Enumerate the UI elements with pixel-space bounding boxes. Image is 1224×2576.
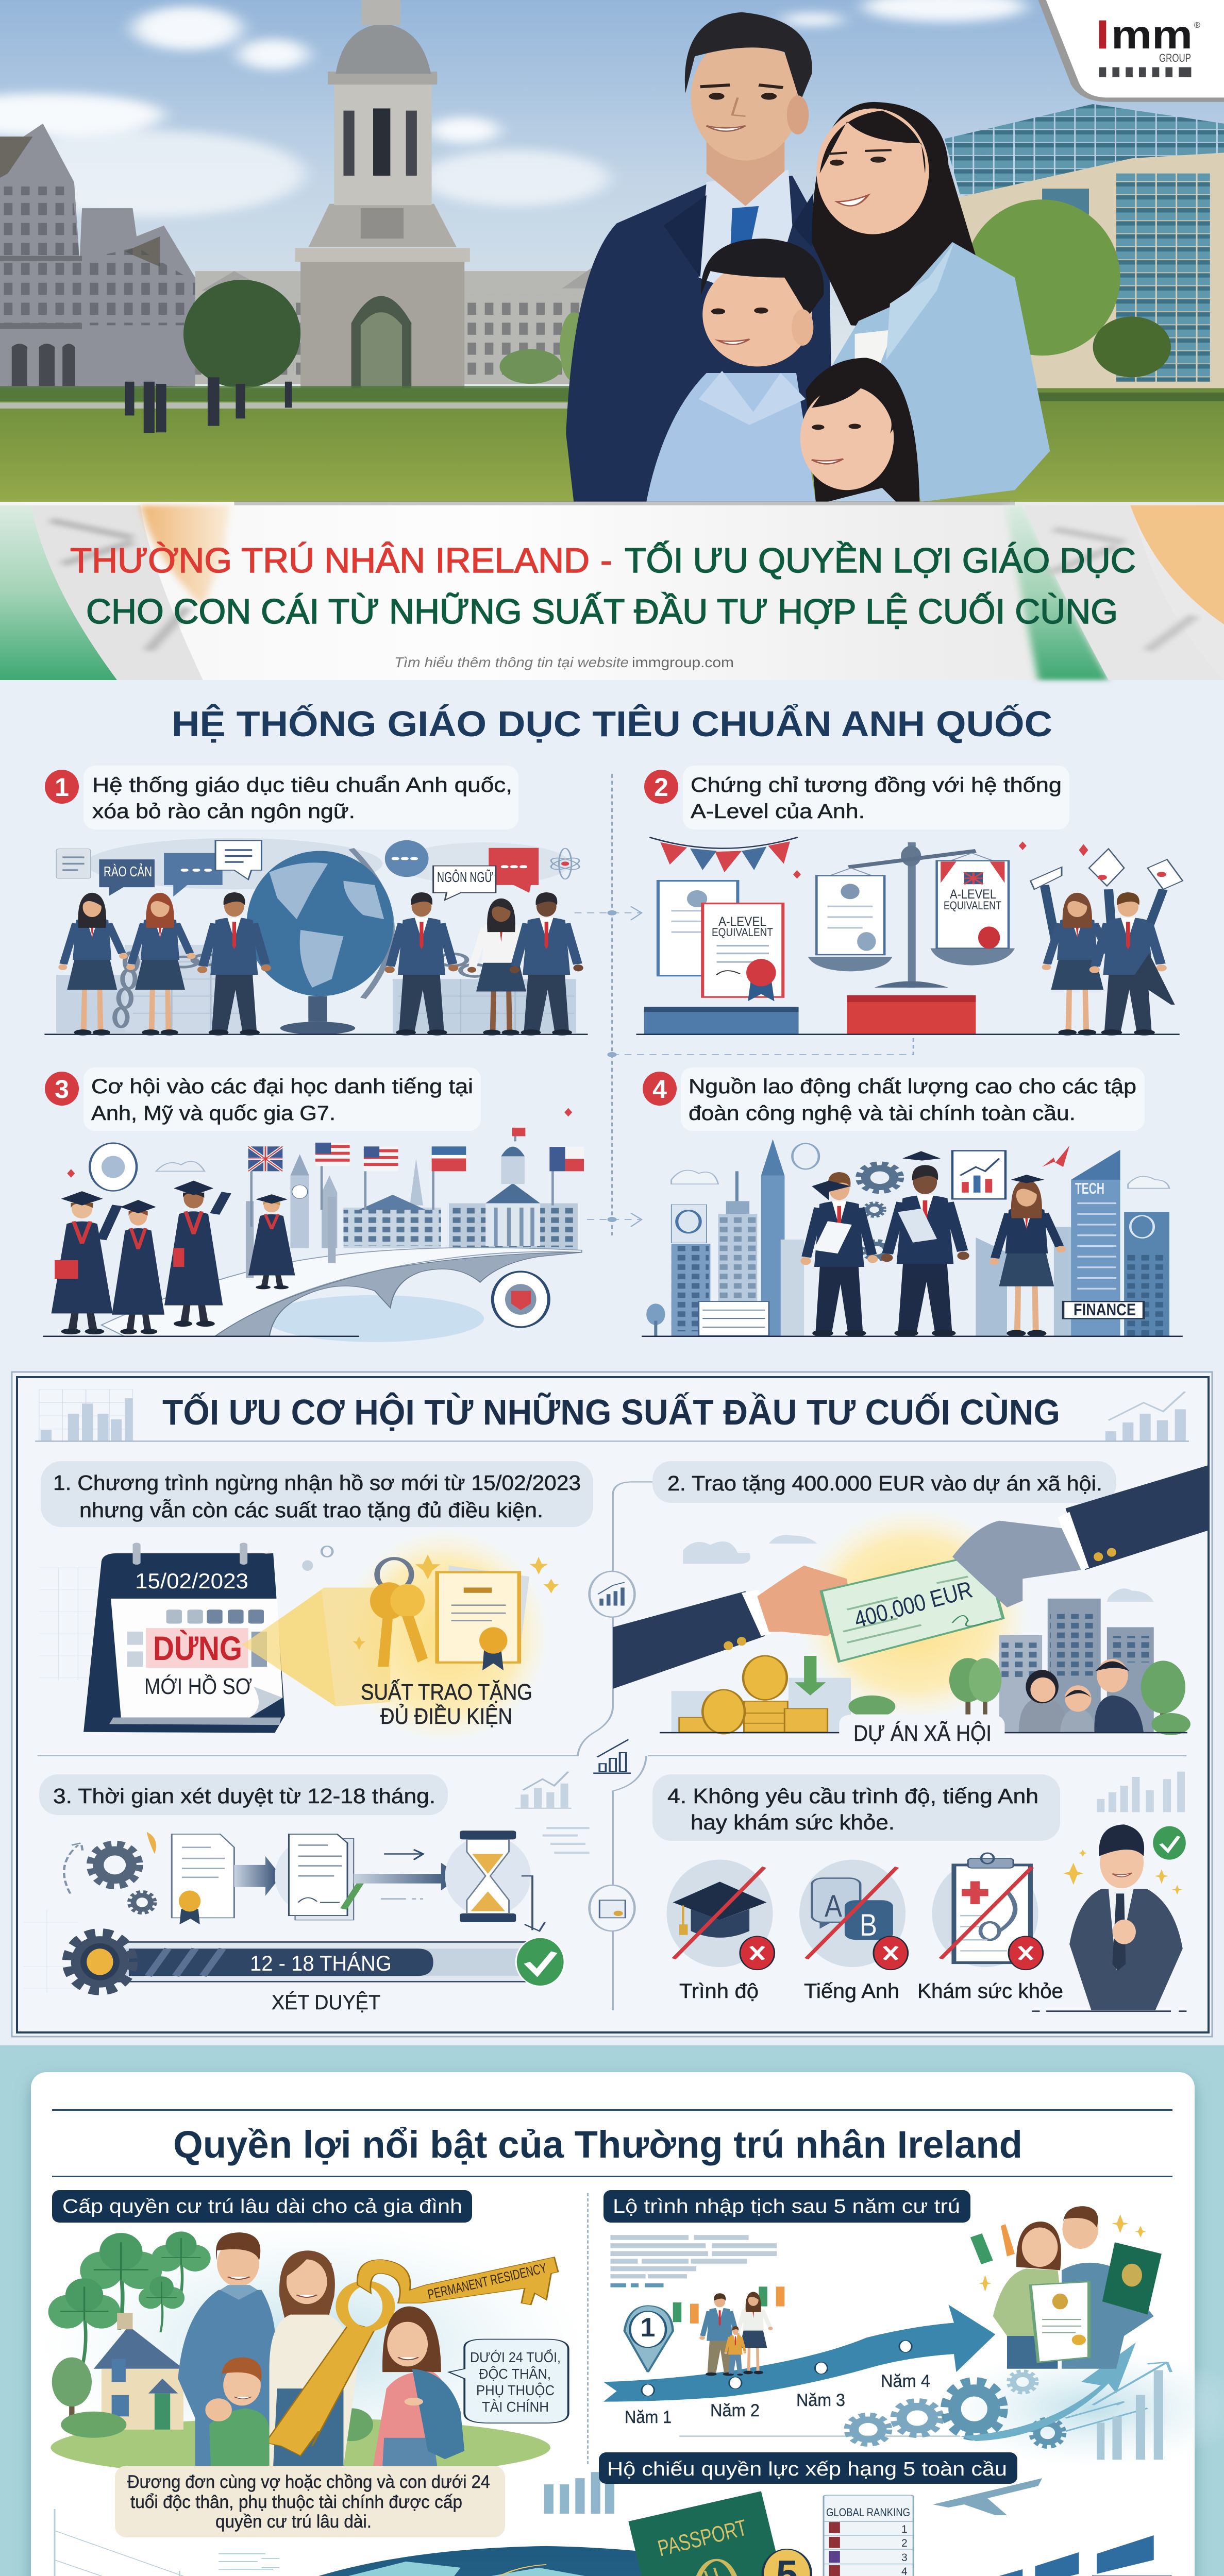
illustration: crossed icons and businessman xyxy=(667,1772,1186,2011)
panel 3: prestigious universities xyxy=(43,1067,584,1342)
pill heading xyxy=(599,2452,1017,2484)
label: rào cản: RÀO CẢN xyxy=(104,863,152,879)
number badge 4: 4 xyxy=(652,1075,667,1104)
speech bubble text: TÀI CHÍNH xyxy=(482,2399,549,2415)
number badge 3: 3 xyxy=(55,1075,69,1104)
label: ngôn ngữ: NGÔN NGỮ xyxy=(437,869,493,885)
callout 1 text: 1. Chương trình ngừng nhận hồ sơ mới từ 15/02/2023 xyxy=(53,1471,581,1495)
man xyxy=(566,176,831,502)
heading: Quyền lợi nổi bật của Thường trú nhân Ireland xyxy=(173,2123,1022,2166)
progress label: 12 - 18 THÁNG xyxy=(250,1951,392,1975)
section: British standard education system xyxy=(43,703,1183,1342)
dashed connectors xyxy=(575,774,913,1235)
title line 1 green: TỐI ƯU QUYỀN LỢI GIÁO DỤC xyxy=(625,540,1136,580)
title line 1 red: THƯỜNG TRÚ NHÂN IRELAND xyxy=(70,541,590,580)
panel 1: program closed but slots remain xyxy=(39,1461,593,1744)
callout 1 xyxy=(41,1461,593,1527)
stop label: DỪNG xyxy=(153,1629,242,1667)
trees behind xyxy=(183,280,300,388)
note text xyxy=(127,2472,490,2532)
pill heading xyxy=(52,2190,472,2223)
certificate label right xyxy=(944,887,1001,912)
callout 3 text: Cơ hội vào các đại học danh tiếng tại xyxy=(91,1075,473,1098)
callout 4 text xyxy=(689,1075,1136,1125)
illustration: certificates, scales, celebrating graduates xyxy=(636,837,1183,1036)
bars and plane xyxy=(544,2472,614,2514)
logo: IMM Group: mm xyxy=(1111,12,1193,57)
campanile tower xyxy=(300,256,464,400)
rear quad building xyxy=(195,271,601,384)
illustration: graduates crossing bridge to universities and flags xyxy=(43,1108,584,1342)
callout 1 text: xóa bỏ rào cản ngôn ngữ. xyxy=(92,800,355,823)
panel 1: language barrier xyxy=(44,766,588,1036)
right glass and stone buildings xyxy=(945,104,1224,208)
callout 3 box xyxy=(83,1067,481,1131)
callout 1 text: Hệ thống giáo dục tiêu chuẩn Anh quốc, xyxy=(92,774,512,796)
distant people xyxy=(125,377,292,433)
daughter xyxy=(382,2307,441,2372)
eligible slots label: SUẤT TRAO TẶNG xyxy=(361,1679,532,1705)
certificate label left: EQUIVALENT xyxy=(712,926,773,939)
callout 2 box xyxy=(683,766,1069,829)
pill text: Lộ trình nhập tịch sau 5 năm cư trú xyxy=(613,2196,960,2217)
requirement labels: Trình độ xyxy=(679,1980,759,2003)
title band with Irish flag drapes: immgroup.com xyxy=(632,654,734,670)
man xyxy=(1069,1889,1183,2010)
pin number: 1 xyxy=(641,2313,655,2343)
callout 4 text: 4. Không yêu cầu trình độ, tiếng Anh xyxy=(667,1784,1038,1808)
year labels: Năm 4 xyxy=(881,2371,930,2391)
mother xyxy=(279,2250,335,2319)
title line 2 green: CHO CON CÁI TỪ NHỮNG SUẤT ĐẦU TƯ HỢP LỆ CUỐI CÙNG xyxy=(86,591,1118,631)
eligible slots label: ĐỦ ĐIỀU KIỆN xyxy=(380,1703,512,1729)
son xyxy=(209,2408,270,2466)
heading rules xyxy=(52,2109,1172,2177)
label: A: A xyxy=(825,1889,842,1923)
panel: passport ranked 5 xyxy=(55,2370,1171,2576)
callout 2 text: A-Level của Anh. xyxy=(691,800,865,823)
callout 4 box xyxy=(681,1067,1145,1131)
number badge 2: 2 xyxy=(654,773,668,802)
callout 2 xyxy=(652,1461,1116,1503)
new applications label: MỚI HỒ SƠ xyxy=(144,1673,252,1699)
social project label: DỰ ÁN XÃ HỘI xyxy=(853,1720,992,1746)
speech bubble text: PHỤ THUỘC xyxy=(476,2382,555,2398)
pill text: Hộ chiếu quyền lực xếp hạng 5 toàn cầu xyxy=(607,2459,1007,2480)
illustration: 5-year path arrow, family, passport xyxy=(603,2206,1224,2467)
panel 4: no requirements xyxy=(652,1772,1186,2011)
requirement labels xyxy=(679,1980,1063,2003)
panel 3: review time xyxy=(23,1772,590,2014)
callout 1 box xyxy=(83,766,518,829)
callout 3 text: 3. Thời gian xét duyệt từ 12-18 tháng. xyxy=(53,1784,435,1808)
callout 4 text xyxy=(667,1784,1038,1834)
callout 3 xyxy=(39,1774,448,1815)
number badge 4 xyxy=(643,1072,677,1106)
year labels: Năm 2 xyxy=(710,2401,760,2420)
title band with Irish flag drapes xyxy=(0,501,1224,680)
logo: IMM Group: GROUP xyxy=(1159,52,1191,64)
panel 2: A-level equivalent xyxy=(636,766,1183,1036)
number badge 1 xyxy=(45,770,79,804)
callout 4 xyxy=(652,1774,1060,1841)
panel 4: global workforce xyxy=(642,1067,1183,1337)
illustration: world map, passports, airport gates xyxy=(55,2370,1171,2576)
panel: citizenship roadmap xyxy=(603,2190,1224,2467)
callout 4 text: Nguồn lao động chất lượng cao cho các tập xyxy=(689,1075,1136,1098)
section: final investment slots, framed xyxy=(12,1372,1212,2037)
calendar date: 15/02/2023 xyxy=(135,1569,248,1593)
ranking title: GLOBAL RANKING xyxy=(826,2506,910,2519)
panel 2: donation of 400,000 EUR xyxy=(613,1461,1209,1746)
callout 4 text: hay khám sức khỏe. xyxy=(691,1810,895,1834)
label: FINANCE: FINANCE xyxy=(1074,1300,1136,1319)
ranking numbers xyxy=(845,2523,908,2576)
boy xyxy=(646,373,816,502)
beige note box xyxy=(115,2466,505,2537)
title dash: - xyxy=(600,541,612,580)
pill text: Cấp quyền cư trú lâu dài cho cả gia đình xyxy=(62,2196,462,2217)
callout 3 text: Anh, Mỹ và quốc gia G7. xyxy=(91,1102,336,1125)
callout 1 text: nhưng vẫn còn các suất trao tặng đủ điều kiện. xyxy=(79,1498,543,1522)
note text: tuổi độc thân, phụ thuộc tài chính được cấp xyxy=(130,2492,462,2512)
illustration: cheque handover, coins, community xyxy=(613,1465,1209,1746)
ranking numbers: 3 xyxy=(901,2552,908,2564)
year labels: Năm 3 xyxy=(796,2391,845,2410)
key xyxy=(265,2323,375,2456)
requirement labels: Khám sức khỏe xyxy=(917,1980,1063,2003)
number badge 2 xyxy=(644,770,678,804)
certificate label left xyxy=(712,914,773,939)
lawn xyxy=(0,388,1224,502)
heading: HỆ THỐNG GIÁO DỤC TIÊU CHUẨN ANH QUỐC xyxy=(172,703,1052,744)
callout 2 text xyxy=(691,774,1062,823)
certificate label right: EQUIVALENT xyxy=(944,899,1001,912)
year labels xyxy=(625,2371,930,2427)
father xyxy=(178,2290,275,2466)
illustration: calendar and golden keys xyxy=(39,1528,559,1744)
cheque amount: 400.000 EUR xyxy=(851,1575,975,1633)
passport top label: PASSPORT xyxy=(656,2515,749,2562)
decorative heading charts and connectors xyxy=(35,1389,1189,2010)
teal background xyxy=(0,2045,1224,2576)
eligible slots label xyxy=(361,1679,532,1729)
callout 3 text xyxy=(91,1075,473,1125)
bubble xyxy=(449,2339,568,2423)
key label: PERMANENT RESIDENCY xyxy=(426,2260,548,2302)
certificate label right: A-LEVEL xyxy=(950,887,996,902)
woman xyxy=(812,102,976,330)
label: B: B xyxy=(860,1908,877,1942)
ranking numbers: 2 xyxy=(901,2537,908,2549)
section: benefits card on teal background xyxy=(0,2045,1224,2576)
callout 2 text: Chứng chỉ tương đồng với hệ thống xyxy=(691,774,1062,796)
speech bubble text xyxy=(470,2349,561,2415)
hero photo: family at Trinity College xyxy=(0,0,1224,502)
couple with flag and passport xyxy=(970,2224,1015,2264)
girl xyxy=(806,358,919,502)
logo: IMM Group xyxy=(1038,0,1224,102)
illustration: documents, hourglass, progress bar xyxy=(23,1772,590,1993)
pill heading xyxy=(603,2190,970,2223)
callout 4 text: đoàn công nghệ và tài chính toàn cầu. xyxy=(689,1102,1076,1125)
logo: IMM Group: ® xyxy=(1194,21,1200,30)
illustration: city skyline and professionals xyxy=(642,1139,1183,1337)
year labels: Năm 1 xyxy=(625,2408,672,2427)
panel: family residency xyxy=(39,2190,588,2537)
illustration: family with golden key xyxy=(39,2193,588,2477)
callout 1 text xyxy=(92,774,512,823)
certificate label left: A-LEVEL xyxy=(718,914,766,929)
illustration: students, globe and broken chain xyxy=(44,838,588,1036)
callout 2 text: 2. Trao tặng 400.000 EUR vào dự án xã hội. xyxy=(667,1471,1102,1495)
review label: XÉT DUYỆT xyxy=(272,1991,380,2014)
ranking table xyxy=(824,2495,913,2576)
frame xyxy=(12,1372,1212,2037)
left gothic building xyxy=(0,124,195,393)
requirement labels: Tiếng Anh xyxy=(804,1980,899,2003)
callout 1 text xyxy=(53,1471,581,1522)
speech bubble text: ĐỘC THÂN, xyxy=(479,2366,551,2382)
ranking numbers: 1 xyxy=(901,2523,908,2535)
note text: quyền cư trú lâu dài. xyxy=(215,2512,372,2532)
note text: Đương đơn cùng vợ hoặc chồng và con dưới 24 xyxy=(127,2472,490,2492)
label: TECH: TECH xyxy=(1075,1179,1104,1197)
website note: Tìm hiểu thêm thông tin tại website xyxy=(394,654,629,670)
number badge 3 xyxy=(45,1072,79,1106)
speech bubble text: DƯỚI 24 TUỔI, xyxy=(470,2349,561,2365)
heading: TỐI ƯU CƠ HỘI TỪ NHỮNG SUẤT ĐẦU TƯ CUỐI CÙNG xyxy=(162,1392,1060,1432)
number badge 1: 1 xyxy=(55,773,69,802)
white card xyxy=(31,2072,1195,2576)
gates xyxy=(945,2575,1171,2576)
